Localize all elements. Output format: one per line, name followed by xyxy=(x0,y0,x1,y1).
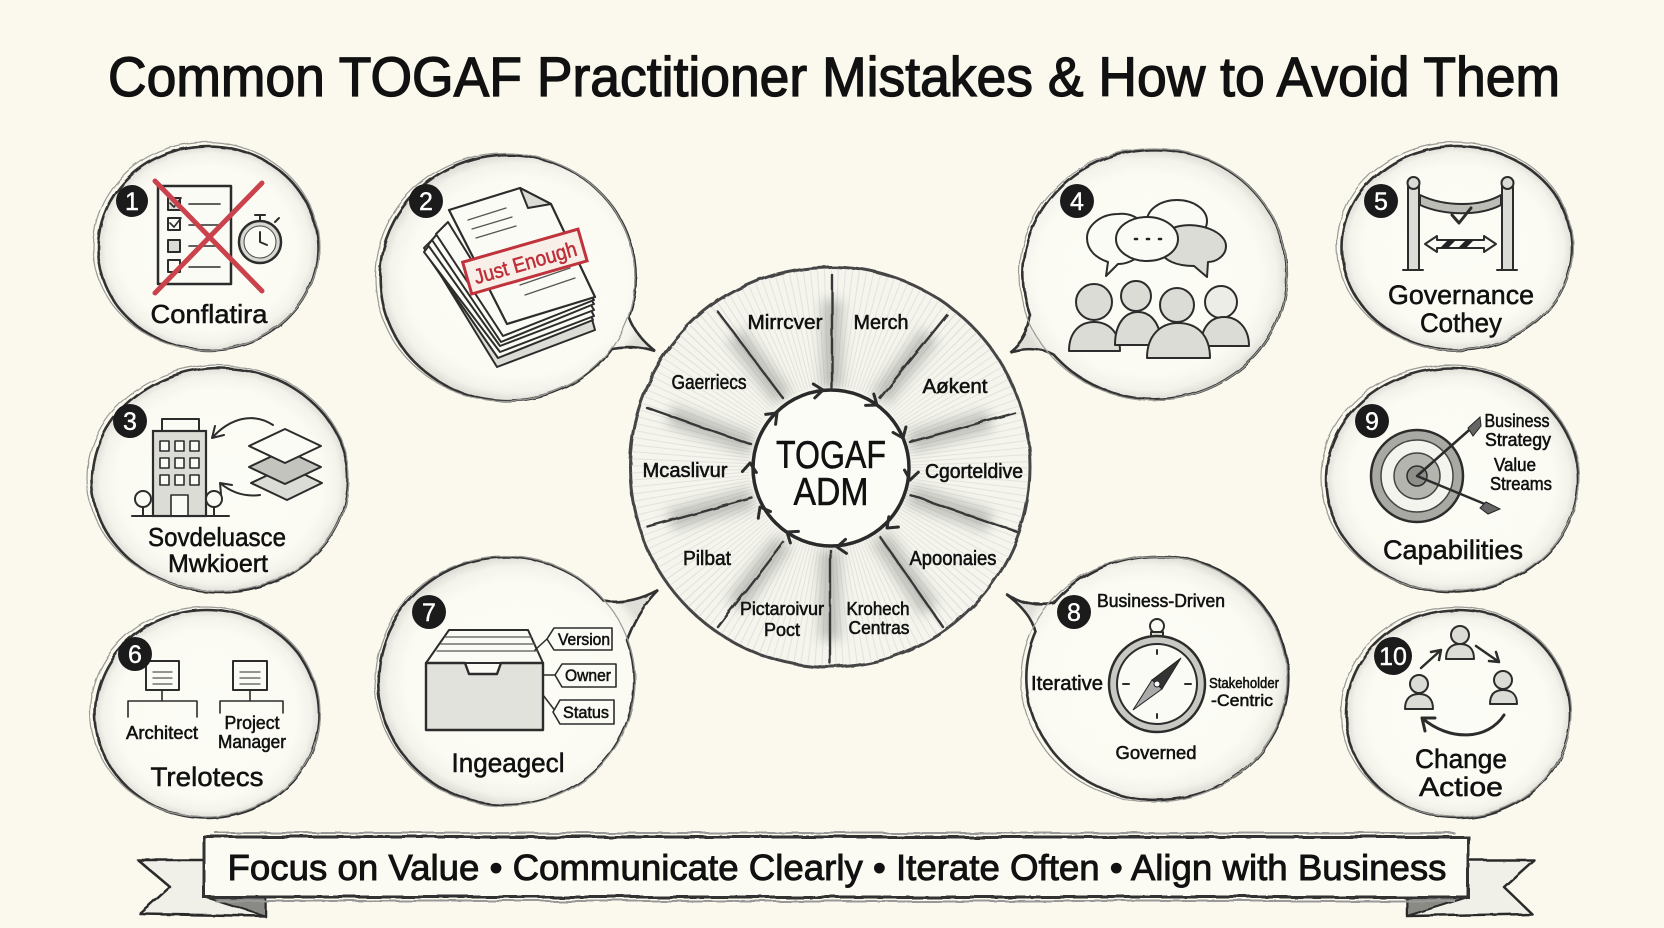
panel: mistake 8 compass principles xyxy=(1006,556,1288,802)
phase labels: Centras xyxy=(848,618,910,638)
icon: file drawer xyxy=(426,630,543,730)
icon: crossed out checklist xyxy=(155,181,262,293)
label: Capabilities xyxy=(1383,535,1523,565)
principle labels: Governed xyxy=(1116,743,1196,763)
label: Ingeagecl xyxy=(452,748,564,778)
chart: TOGAF ADM wheel xyxy=(630,267,1030,667)
phase labels: Krohech xyxy=(846,599,910,619)
icon: people group xyxy=(1069,281,1249,358)
number badge 10: 10 xyxy=(1379,643,1407,671)
icon: stanchions and ribbon xyxy=(1403,177,1517,270)
principle labels: -Centric xyxy=(1211,691,1274,710)
icon: target with arrows xyxy=(1371,417,1500,522)
metadata tags: Version xyxy=(558,630,610,649)
phase labels: Poct xyxy=(764,620,800,640)
icon: speech bubbles xyxy=(1087,200,1226,277)
title: Common TOGAF Practitioner Mistakes & How to Avoid Them xyxy=(108,45,1560,108)
strategy labels: Strategy xyxy=(1485,430,1551,450)
phase labels xyxy=(642,312,1023,640)
number badge 10 xyxy=(1374,637,1412,675)
metadata tags: Status xyxy=(563,703,609,722)
icon: stopwatch xyxy=(239,215,281,263)
role labels: Project xyxy=(224,713,280,733)
icon: document stack xyxy=(424,188,595,367)
label: Actioe xyxy=(1419,772,1503,802)
hub title: ADM xyxy=(794,471,868,514)
hub title xyxy=(776,434,886,514)
phase labels: Cgorteldive xyxy=(925,461,1023,483)
label: Change xyxy=(1415,744,1507,774)
principle labels xyxy=(1031,591,1279,763)
panel: mistake 4 stakeholder communication xyxy=(1010,148,1287,400)
metadata tags: Owner xyxy=(565,666,611,685)
label: Trelotecs xyxy=(150,762,264,792)
number badge 6: 6 xyxy=(128,641,142,669)
panel: mistake 9 target capabilities xyxy=(1321,365,1579,592)
number badge 4: 4 xyxy=(1070,188,1084,216)
phase labels: Apoonaies xyxy=(910,548,996,570)
number badge 9 xyxy=(1355,404,1389,438)
panel: mistake 1 conflating checklist xyxy=(93,142,319,350)
panel: mistake 2 just enough documents xyxy=(375,153,656,401)
banner: key takeaways ribbon xyxy=(138,833,1534,916)
role labels xyxy=(126,713,286,752)
role labels: Architect xyxy=(126,723,198,743)
number badge 3: 3 xyxy=(123,408,137,436)
label: Sovdeluasce xyxy=(148,522,286,552)
arrows: layers to building xyxy=(212,418,273,496)
number badge 1 xyxy=(116,185,148,217)
label xyxy=(148,522,286,578)
label: Conflatira xyxy=(150,299,268,329)
number badge 8: 8 xyxy=(1067,599,1081,627)
number badge 9: 9 xyxy=(1365,408,1379,436)
banner text: Focus on Value • Communicate Clearly • Iterate Often • Align with Business xyxy=(228,847,1446,888)
label xyxy=(1388,280,1534,338)
panel: mistake 10 change action xyxy=(1341,607,1571,818)
phase labels: Gaerriecs xyxy=(672,372,746,394)
phase labels: Aøkent xyxy=(922,376,988,398)
phase labels: Mirrcver xyxy=(748,312,823,334)
principle labels: Business-Driven xyxy=(1097,591,1225,611)
phase labels: Pilbat xyxy=(683,548,731,570)
number badge 6 xyxy=(118,637,152,671)
panel: mistake 5 governance xyxy=(1337,142,1573,350)
number badge 8 xyxy=(1057,595,1091,629)
hub title: TOGAF xyxy=(776,434,886,477)
number badge 2: 2 xyxy=(419,188,433,216)
strategy labels: Streams xyxy=(1490,474,1552,494)
label xyxy=(1415,744,1507,802)
number badge 4 xyxy=(1060,184,1094,218)
role labels: Manager xyxy=(218,732,286,752)
label: Governance xyxy=(1388,280,1534,310)
strategy labels: Business xyxy=(1484,411,1550,431)
phase labels: Mcaslivur xyxy=(642,460,728,482)
metadata tags xyxy=(535,628,616,724)
number badge 1: 1 xyxy=(125,188,139,216)
label: Cothey xyxy=(1420,308,1502,338)
number badge 3 xyxy=(113,404,147,438)
panel: mistake 3 solution vs market xyxy=(87,365,349,592)
panel: mistake 7 artifact repository xyxy=(375,556,658,806)
icon: office building xyxy=(132,419,229,516)
icon: people cycle xyxy=(1405,626,1517,735)
number badge 5: 5 xyxy=(1374,188,1388,216)
number badge 7 xyxy=(412,595,446,629)
principle labels: Iterative xyxy=(1031,673,1103,695)
strategy labels xyxy=(1484,411,1552,494)
hub with cycle arrows xyxy=(742,383,918,554)
icon: org chart boxes xyxy=(128,661,283,717)
strategy labels: Value xyxy=(1494,455,1536,475)
principle labels: Stakeholder xyxy=(1209,675,1279,692)
number badge 7: 7 xyxy=(422,599,436,627)
panel: mistake 6 titles and roles xyxy=(90,607,320,818)
stamp: just enough: Just Enough xyxy=(471,238,580,289)
phase labels: Merch xyxy=(854,312,908,334)
icon: compass xyxy=(1109,619,1205,732)
number badge 5 xyxy=(1364,184,1398,218)
label: Mwkioert xyxy=(168,550,268,578)
icon: stacked layers xyxy=(249,429,322,500)
number badge 2 xyxy=(409,184,443,218)
phase labels: Pictaroivur xyxy=(740,599,824,619)
